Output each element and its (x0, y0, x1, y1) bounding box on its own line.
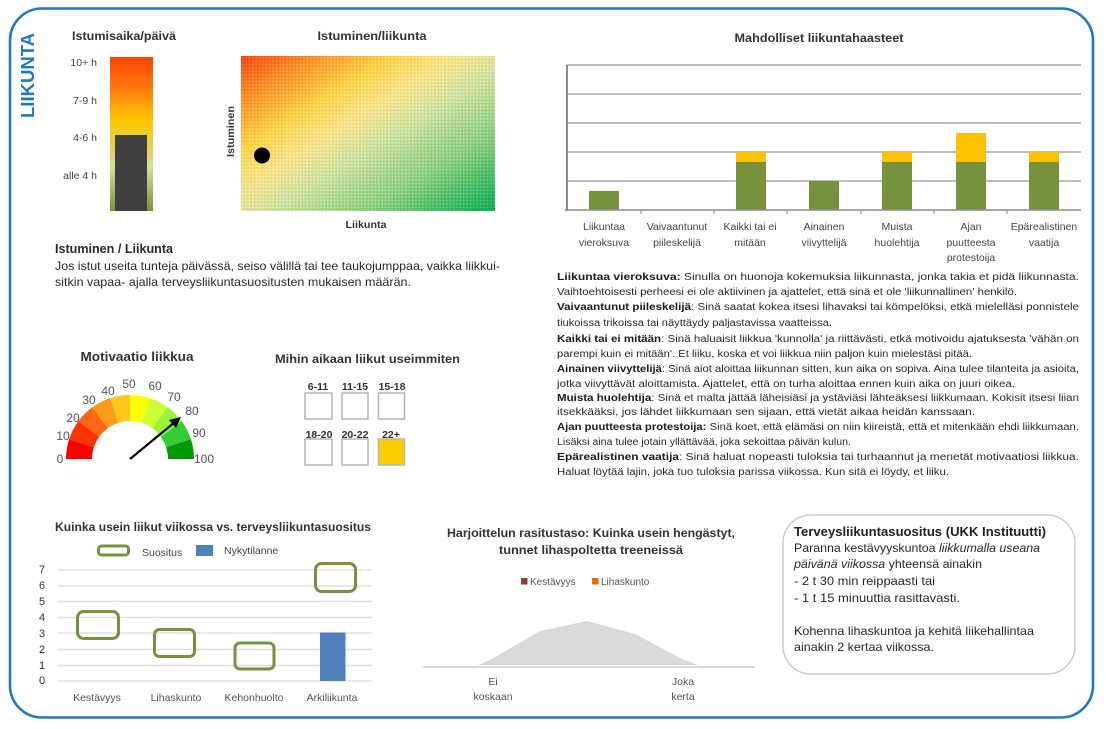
gauge scale labels: 30 (82, 393, 96, 407)
gauge segments (66, 395, 194, 459)
gauge scale labels: 90 (192, 426, 206, 440)
time slot labels: 18-20 (306, 429, 333, 441)
current value bar (320, 632, 346, 681)
current value bar (115, 135, 147, 211)
panel: time of day (275, 352, 460, 465)
axis labels: Joka (672, 676, 694, 688)
legend (521, 577, 650, 588)
gauge scale labels: 0 (57, 452, 64, 466)
text block: challenge descriptions: Haluat löytää lajin, joka tuo tuloksia parissa viikossa. Kun sitä ei löydy, et liiku. (557, 467, 949, 478)
heading: tunnet lihaspoltetta treeneissä (499, 543, 683, 557)
stacked bars (589, 133, 1059, 210)
heading: Istuminen/liikunta: Istuminen/liikunta (318, 29, 427, 43)
callout: health exercise recommendation: - 1 t 15 minuuttia rasittavasti. (794, 591, 960, 605)
category labels: Kestävyys (73, 692, 121, 704)
heading: Mahdolliset liikuntahaasteet: Mahdolliset liikuntahaasteet (734, 31, 904, 45)
category labels: Liikuntaa (583, 221, 625, 233)
callout: health exercise recommendation: - 2 t 30 min reippaasti tai (794, 574, 935, 588)
heading: Harjoittelun rasitustaso: Kuinka usein hengästyt, (447, 526, 735, 540)
category labels: Epärealistinen (1011, 221, 1077, 233)
gauge scale labels: 60 (148, 379, 162, 393)
category labels: Ajan (960, 221, 982, 233)
gauge scale labels: 70 (167, 390, 181, 404)
text block: challenge descriptions: tiukoissa trikoissa tai näyttäydy paljastavissa vaatteissa. (557, 318, 832, 329)
callout: health exercise recommendation: Terveysliikuntasuositus (UKK Instituutti) (794, 525, 1046, 539)
y axis labels: 0 (39, 675, 45, 687)
category labels (73, 692, 358, 704)
section title: LIIKUNTA: LIIKUNTA (17, 33, 38, 118)
current position marker (254, 148, 270, 164)
legend: Suositus (142, 547, 182, 559)
callout: health exercise recommendation: päivänä viikossa yhteensä ainakin (793, 557, 982, 571)
category labels: Arkiliikunta (307, 692, 358, 704)
panel: sitting time per day (63, 29, 176, 211)
panel: motivation gauge (56, 349, 214, 466)
text block: sitting advice (55, 242, 500, 289)
y axis labels: 7 (39, 564, 45, 576)
y axis labels (39, 564, 45, 687)
heatmap gradient (241, 56, 495, 211)
y axis label: Istuminen (225, 106, 237, 157)
text block: challenge descriptions: Epärealistinen vaatija : Sinä haluat nopeasti tuloksia tai turhaannut ja menetät motivaatiosi liikkua. (557, 452, 1079, 463)
time slot labels: 6-11 (308, 381, 328, 393)
category labels: Kaikki tai ei (723, 221, 777, 233)
text block: challenge descriptions: Vaihtoehtoisesti perheesi ei ole aktiivinen ja ajattelet, että sinä et ole 'liikunnallinen' henkilö. (557, 287, 1017, 298)
y axis labels: 6 (39, 580, 45, 592)
heading: Mihin aikaan liikut useimmiten: Mihin aikaan liikut useimmiten (275, 352, 460, 366)
text block: challenge descriptions: Kaikki tai ei mitään : Sinä haluaisit liikkua 'kunnolla' ja riittävästi, etkä motivoidu ajatuksesta 'vähän on (557, 334, 1079, 345)
category labels: Muista (882, 221, 913, 233)
text block: sitting advice: sitkin vapaa- ajalla terveysliikuntasuositusten mukaisen määrän. (55, 275, 411, 289)
time slot labels: 11-15 (342, 381, 368, 393)
y axis labels: 5 (39, 596, 45, 608)
text block: challenge descriptions: parempi kuin ei mitään'. Et liiku, koska et voi liikkua niin paljon kuin mielestäsi pitää. (557, 349, 972, 360)
category labels: viivyttelijä (802, 237, 847, 249)
time slot labels: 20-22 (342, 429, 369, 441)
category labels: protestoija (947, 252, 995, 264)
text block: challenge descriptions: Ainainen viivyttelijä : Sinä aiot aloittaa liikunnan sitten, kun aika on sopiva. Aina tulee tilanteita ja asioita, (557, 364, 1079, 375)
scale labels: 10+ h (70, 57, 97, 69)
time slot labels: 15-18 (379, 381, 406, 393)
callout: health exercise recommendation: ainakin 2 kertaa viikossa. (794, 640, 934, 654)
axis labels (473, 676, 695, 703)
chart axes (565, 65, 1081, 214)
panel: sitting vs exercise heatmap (225, 29, 495, 231)
baseline (423, 666, 755, 668)
gradient scale bar (110, 57, 153, 211)
x axis label: Liikunta (346, 219, 387, 231)
scale labels: alle 4 h (63, 170, 97, 182)
panel: weekly frequency vs recommendation chart (39, 520, 372, 704)
gauge scale labels: 100 (194, 452, 214, 466)
category labels: Ainainen (804, 221, 845, 233)
category labels: vaatija (1029, 237, 1059, 249)
category labels: puutteesta (946, 237, 996, 249)
axis labels: koskaan (473, 691, 513, 703)
legend (98, 545, 278, 559)
text block: challenge descriptions: Vaivaantunut piileskelijä : Sinä saatat kokea itsesi lihavaksi tai kömpelöksi, etkä mielelläsi ponnistele (557, 302, 1080, 313)
y axis labels: 2 (39, 644, 45, 656)
gauge scale labels: 10 (56, 429, 70, 443)
category labels: Vaivaantunut (647, 221, 707, 233)
gauge scale labels: 80 (185, 404, 199, 418)
panel: training intensity chart (423, 526, 755, 703)
category labels: Kehonhuolto (225, 692, 284, 704)
callout: health exercise recommendation: Paranna kestävyyskuntoa liikkumalla useana (794, 541, 1040, 555)
category labels: huolehtija (875, 237, 920, 249)
legend: Nykytilanne (224, 545, 278, 557)
scale labels: 7-9 h (73, 95, 97, 107)
heatmap dot texture (241, 56, 495, 211)
heading (447, 526, 735, 557)
category labels: mitään (734, 237, 766, 249)
scale labels (63, 57, 97, 182)
text block: challenge descriptions: Ajan puutteesta protestoija: Sinä koet, että elämäsi on niin kiireistä, että et mitenkään ehdi liikkumaan. (557, 422, 1079, 433)
text block: challenge descriptions: Liikuntaa vieroksuva: Sinulla on huonoja kokemuksia liikunnasta, jonka takia et pidä liikunnasta. (557, 272, 1079, 283)
heading: Kuinka usein liikut viikossa vs. terveysliikuntasuositus (55, 520, 371, 534)
text block: challenge descriptions: Lisäksi aina tulee jotain yllättävää, joka sekoittaa päivän kulun. (557, 437, 851, 448)
heading: Istumisaika/päivä: Istumisaika/päivä (72, 29, 176, 43)
text block: challenge descriptions (556, 272, 1080, 478)
gauge scale labels: 50 (122, 377, 136, 391)
axis labels: Ei (488, 676, 498, 688)
text block: sitting advice: Jos istut useita tunteja päivässä, seiso välillä tai tee taukojumppaa, vaikka liikkui- (55, 259, 500, 273)
text block: challenge descriptions: jotka viivyttävät aloittamista. Ajattelet, että on turha aloittaa ennen kuin aika on juuri oikea. (556, 379, 1015, 390)
callout: health exercise recommendation (783, 515, 1075, 674)
time slot boxes (305, 393, 404, 465)
recommendation range boxes (78, 564, 356, 669)
gauge needle arrow (130, 417, 181, 459)
time slot labels (306, 381, 406, 441)
text block: challenge descriptions: Muista huolehtija : Sinä et malta jättää läheisiäsi ja ystäviäsi lähteäksesi liikkumaan. Kokisit itsesi liian (557, 393, 1079, 404)
scale labels: 4-6 h (73, 132, 97, 144)
y axis labels: 1 (39, 660, 45, 672)
time slot labels: 22+ (382, 429, 400, 441)
text block: sitting advice: Istuminen / Liikunta (55, 242, 174, 256)
category labels: vieroksuva (579, 237, 629, 249)
area shape (478, 621, 698, 665)
category labels (579, 221, 1077, 264)
y axis labels: 4 (39, 612, 45, 624)
y axis labels: 3 (39, 628, 45, 640)
axis labels: kerta (671, 691, 695, 703)
text block: challenge descriptions: itsekkääksi, jos lähdet liikkumaan sen sijaan, että vietät aikaa heidän kanssaan. (557, 407, 975, 418)
category labels: piileskelijä (653, 237, 701, 249)
legend: Lihaskunto (601, 577, 650, 588)
legend: Kestävyys (530, 577, 576, 588)
category labels: Lihaskunto (151, 692, 202, 704)
gauge scale labels: 20 (66, 411, 80, 425)
gauge scale labels (56, 377, 214, 466)
heading: Motivaatio liikkua: Motivaatio liikkua (80, 349, 194, 364)
callout: health exercise recommendation: Kohenna lihaskuntoa ja kehitä liikehallintaa (794, 624, 1034, 638)
panel: possible exercise challenges chart (565, 31, 1081, 264)
gauge scale labels: 40 (101, 384, 115, 398)
